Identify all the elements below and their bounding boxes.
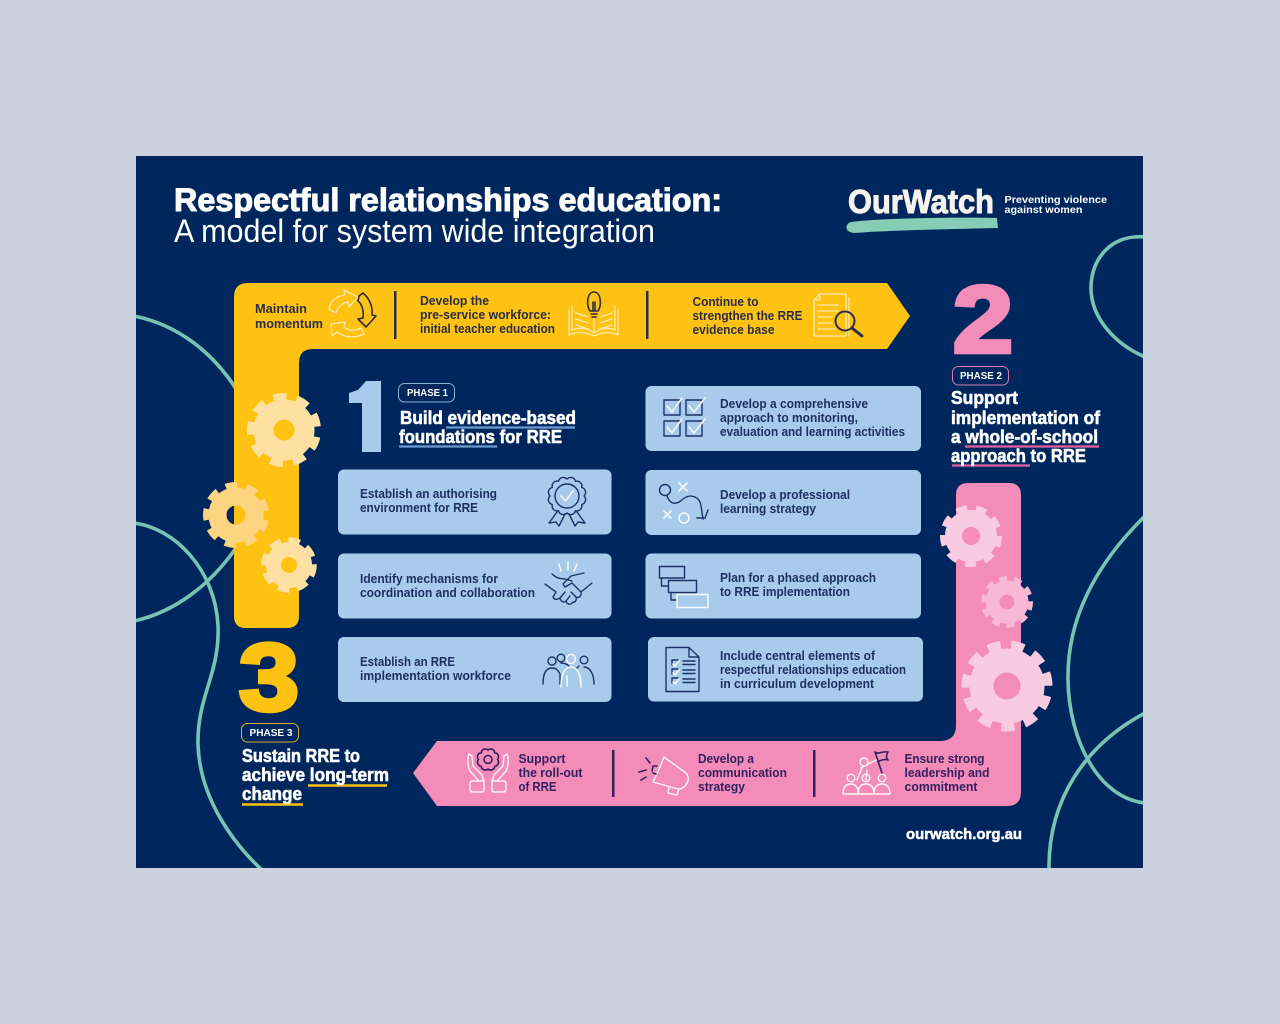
number 3: 3 [239,625,299,731]
item: communication strategy [698,751,787,794]
icon: group of people [543,654,594,687]
logo: OurWatch [846,183,1107,233]
arrow: yellow phase 3 band [234,283,910,628]
item: strong leadership: Ensure strong [904,751,985,766]
decorative teal lines [134,237,1145,870]
item: pre-service workforce: pre-service workforce: [420,307,551,322]
gear: pink middle [984,578,1030,626]
heading: phase 2: implementation of [951,408,1101,428]
title: A model for system wide integration [174,213,655,249]
card: professional learning: Develop a professional [720,487,850,502]
gear: yellow large [244,390,324,470]
icon: hands holding a gear [468,749,508,792]
card: coordination and collaboration [338,554,612,618]
item: support the roll-out [518,751,583,794]
divider [612,750,614,797]
gear: yellow middle [201,480,271,550]
item: support the roll-out: of RRE [518,779,557,794]
item: maintain momentum: momentum [255,316,323,331]
badge: phase 1: PHASE 1 [407,388,448,399]
item: strong leadership: commitment [904,779,978,794]
badge: phase 3 [242,724,298,742]
heading: phase 2: a whole-of-school [951,427,1098,447]
heading: phase 1 [399,408,576,447]
icon: leader with flag and group [843,752,890,794]
item: maintain momentum: Maintain [255,301,307,316]
card: coordination and collaboration: coordination and collaboration [360,585,535,600]
item: communication strategy: strategy [698,779,746,794]
icon: cycle arrows [329,290,376,337]
item: communication strategy: Develop a [698,751,755,766]
item: strengthen evidence base: Continue to [692,294,759,309]
icon: document and magnifier [814,294,862,336]
item: support the roll-out: Support [518,751,566,766]
card: phased approach: to RRE implementation [720,584,850,599]
badge: phase 2 [952,366,1008,385]
item: pre-service workforce: Develop the [420,293,489,308]
card: implementation workforce: Establish an RRE [360,654,455,669]
item: strengthen evidence base: strengthen the RRE [692,308,803,323]
card: implementation workforce [338,637,612,702]
heading: phase 2: approach to RRE [951,446,1086,466]
heading: phase 2 [951,388,1101,466]
icon: checklist document [666,648,699,692]
item: pre-service workforce [420,293,555,336]
icon: strategy route [660,483,708,523]
item: strong leadership: leadership and [904,765,990,780]
item: support the roll-out: the roll-out [518,765,583,780]
number 2: 2 [953,267,1013,373]
badge: phase 3: PHASE 3 [250,728,293,739]
card: curriculum development [648,637,923,702]
card: monitoring and evaluation [646,386,921,451]
panel: navy background [136,156,1143,868]
item: communication strategy: communication [698,765,787,780]
gear: pink upper [943,508,999,564]
icon: checkboxes [664,398,705,436]
icon: award rosette [548,477,586,526]
arrow: pink phase 2 band [413,483,1021,806]
heading: phase 3: change [242,784,302,804]
card: authorising environment [338,470,612,534]
card: monitoring and evaluation: Develop a comprehensive [720,396,868,411]
card: implementation workforce: implementation workforce [360,668,511,683]
icon: megaphone [639,757,688,795]
card: phased approach [646,554,921,618]
title: Respectful relationships education: [174,182,722,218]
divider [394,291,396,339]
card: monitoring and evaluation: approach to monitoring, [720,410,858,425]
heading: phase 3 [242,746,389,804]
icon: stacked phases [660,566,708,608]
card: phased approach: Plan for a phased approach [720,570,876,585]
logo: OurWatch: against women [1004,204,1082,216]
card: professional learning [646,470,921,535]
website url: ourwatch.org.au [906,827,1022,843]
gear: yellow small [264,540,314,590]
card: monitoring and evaluation: evaluation and learning activities [720,424,905,439]
heading: phase 2: Support [951,388,1018,408]
card: authorising environment: Establish an authorising [360,486,497,501]
heading: phase 1: foundations for RRE [399,427,562,447]
heading: phase 1: Build evidence-based [400,408,576,428]
heading: phase 3: achieve long-term [242,765,389,785]
icon: book and light bulb [569,292,618,336]
card: curriculum development: in curriculum development [720,676,875,691]
heading: phase 3: Sustain RRE to [242,746,360,766]
item: pre-service workforce: initial teacher education [420,321,555,336]
number 1: 1 [341,362,399,479]
logo: OurWatch: Preventing violence [1004,194,1107,206]
item: strong leadership [904,751,990,794]
icon: handshake [545,562,592,604]
card: professional learning: learning strategy [720,501,817,516]
item: maintain momentum [255,301,323,331]
card: coordination and collaboration: Identify mechanisms for [360,571,498,586]
item: strengthen evidence base [692,294,803,337]
card: curriculum development: Include central elements of [720,648,876,663]
badge: phase 1 [398,384,454,402]
card: curriculum development: respectful relationships education [720,662,906,677]
divider [646,291,648,339]
title [174,182,722,249]
badge: phase 2: PHASE 2 [960,371,1002,382]
card: authorising environment: environment for RRE [360,500,478,515]
logo: OurWatch: OurWatch [848,183,994,220]
gear: pink large [957,636,1057,736]
divider [813,750,816,797]
item: strengthen evidence base: evidence base [692,322,774,337]
